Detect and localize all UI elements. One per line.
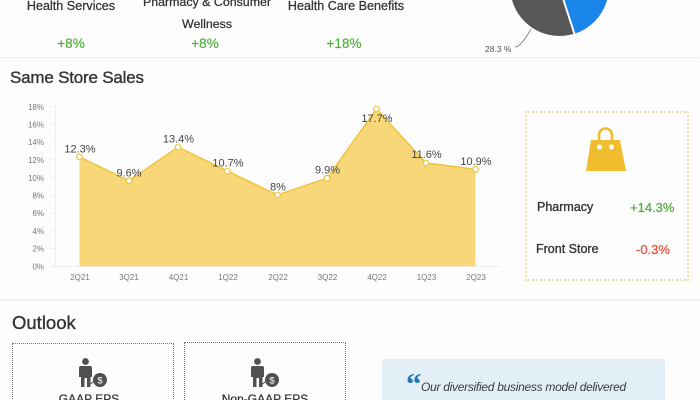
icon: quotation mark: “ — [406, 366, 422, 400]
area chart: same store sales: 4% — [32, 227, 44, 236]
value: Front Store: -0.3% — [636, 242, 670, 257]
area chart: same store sales: 18% — [28, 103, 44, 112]
area chart: same store sales: 10.9% — [460, 156, 492, 168]
growth: Health Care Benefits: +18% — [327, 36, 361, 51]
panel: Non-GAAP EPS — [184, 342, 346, 400]
area chart: same store sales: 9.6% — [116, 168, 142, 180]
area chart: same store sales: 2% — [32, 244, 44, 254]
section divider — [0, 299, 700, 301]
area chart: same store sales: 10% — [28, 174, 44, 183]
area chart: same store sales: 16% — [28, 120, 44, 130]
area chart: same store sales: 12% — [28, 156, 44, 165]
pie chart: 28.3 % — [485, 44, 512, 54]
area chart: same store sales: 4Q22 — [367, 273, 387, 282]
icon: person with dollar — [251, 358, 279, 387]
area chart: same store sales: 1Q23 — [417, 273, 437, 282]
area chart: same store sales: 2Q21 — [70, 273, 90, 282]
area chart: same store sales: 6% — [32, 209, 44, 218]
growth: Pharmacy: +8% — [191, 36, 219, 51]
area chart: same store sales: 1Q22 — [218, 273, 238, 282]
area chart: same store sales: 8% — [32, 192, 44, 200]
panel: quote — [382, 359, 665, 400]
icon: person with dollar: $ — [97, 376, 103, 386]
segment: Pharmacy & Consumer Wellness: Wellness — [182, 17, 232, 31]
area chart: same store sales — [28, 103, 500, 282]
area chart: same store sales: 10.7% — [212, 158, 244, 170]
icon: shopping bag — [586, 127, 626, 171]
area chart: same store sales: 9.9% — [315, 164, 340, 176]
label: Front Store: Front Store — [536, 242, 599, 256]
area chart: same store sales: 3Q21 — [119, 273, 139, 282]
area chart: same store sales: 8% — [270, 182, 286, 194]
heading: Same Store Sales: Same Store Sales — [10, 68, 144, 87]
growth: Health Services: +8% — [57, 36, 85, 51]
area chart: same store sales: 3Q22 — [318, 273, 338, 282]
area chart: same store sales: 0% — [32, 262, 44, 272]
pie chart — [485, 0, 607, 54]
icon: person with dollar: $ — [269, 376, 275, 386]
area chart: same store sales: 12.3% — [64, 144, 96, 156]
area chart: same store sales: 13.4% — [163, 134, 194, 146]
quote text: Our diversified business model delivered — [421, 380, 626, 394]
area chart: same store sales: 14% — [28, 138, 44, 147]
area chart: same store sales: 11.6% — [411, 149, 442, 161]
label: Pharmacy: Pharmacy — [537, 200, 593, 214]
segment: Pharmacy & Consumer Wellness — [143, 0, 271, 31]
heading: Outlook: Outlook — [12, 312, 76, 333]
area chart: same store sales: 17.7% — [361, 113, 393, 125]
area chart: same store sales: 2Q22 — [268, 273, 288, 282]
panel: pharmacy and front store — [525, 111, 689, 281]
area chart: same store sales: 4Q21 — [169, 273, 189, 282]
value: Pharmacy: +14.3% — [630, 200, 674, 215]
panel: GAAP EPS — [12, 343, 174, 400]
icon: person with dollar — [79, 358, 107, 387]
dotted divider — [0, 57, 700, 58]
area chart: same store sales: 2Q23 — [466, 273, 486, 282]
